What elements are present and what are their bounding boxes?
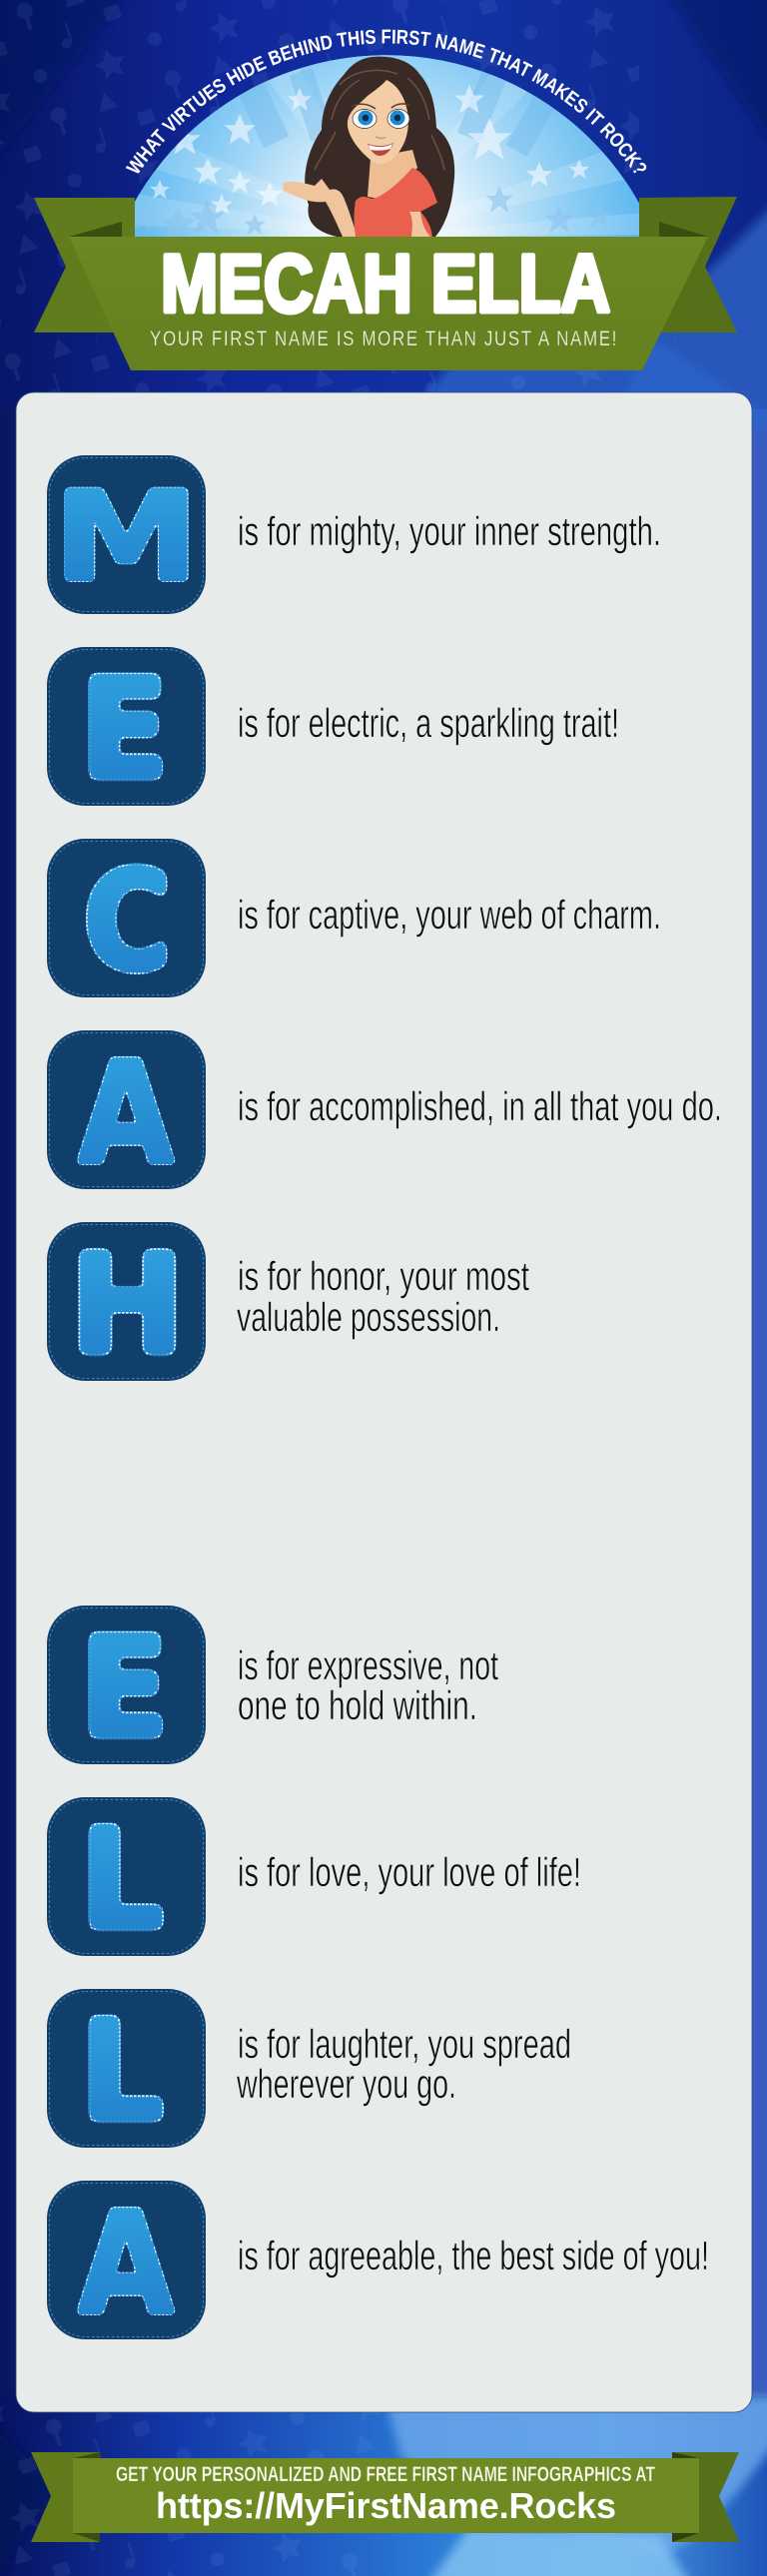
title: MECAH ELLA bbox=[161, 239, 610, 329]
row: A (second): A bbox=[78, 2181, 174, 2346]
face bbox=[348, 80, 408, 164]
row: L bbox=[47, 1797, 581, 1960]
tail right bbox=[672, 2452, 739, 2542]
eyes bbox=[353, 110, 377, 128]
row: L (second) bbox=[47, 1989, 571, 2152]
row: E bbox=[47, 647, 619, 810]
nose bbox=[376, 137, 385, 138]
row: H: valuable possession. bbox=[237, 1294, 500, 1340]
footer ribbon bbox=[31, 2452, 739, 2542]
front panel bbox=[69, 237, 708, 370]
tile C bbox=[47, 839, 206, 997]
row: M: M bbox=[53, 465, 200, 609]
ribbon tail right bbox=[639, 197, 737, 332]
row: E: E bbox=[80, 649, 168, 810]
text: is for love, your love of life! bbox=[238, 1849, 581, 1895]
front bbox=[73, 2458, 699, 2533]
row: H bbox=[47, 1222, 529, 1385]
illustration: woman bbox=[283, 57, 454, 237]
brows bbox=[352, 104, 410, 109]
text: is for expressive, not bbox=[238, 1642, 498, 1688]
mouth bbox=[368, 143, 393, 156]
hair bbox=[305, 57, 454, 237]
ribbon: title banner bbox=[34, 197, 737, 370]
row: L (second): L bbox=[80, 1991, 164, 2152]
tile E bbox=[47, 647, 206, 806]
row: M bbox=[47, 455, 661, 614]
row: C: C bbox=[84, 843, 171, 1001]
subtitle: YOUR FIRST NAME IS MORE THAN JUST A NAME! bbox=[150, 327, 618, 350]
header: dome with starburst bbox=[97, 55, 676, 343]
tile L bbox=[47, 1989, 206, 2148]
shirt bbox=[354, 168, 437, 237]
row: A bbox=[47, 1030, 722, 1196]
ribbon tail left bbox=[34, 198, 135, 332]
tile L bbox=[47, 1797, 206, 1956]
tail left bbox=[31, 2452, 100, 2542]
panel: letters background bbox=[16, 392, 752, 2412]
text: is for electric, a sparkling trait! bbox=[238, 700, 619, 746]
row: L (second): wherever you go. bbox=[236, 2061, 456, 2107]
row: E (second word): E bbox=[80, 1608, 168, 1768]
heading: arched question: WHAT VIRTUES HIDE BEHIND THIS FIRST NAME THAT MAKES IT ROCK? bbox=[126, 30, 647, 174]
row: A: A bbox=[78, 1030, 174, 1196]
tile H bbox=[47, 1222, 206, 1381]
url: https://MyFirstName.Rocks bbox=[156, 2485, 616, 2526]
row: E (second word): one to hold within. bbox=[238, 1682, 477, 1728]
arm and hand bbox=[283, 179, 358, 237]
text: is for honor, your most bbox=[238, 1253, 529, 1299]
row: H: H bbox=[70, 1226, 185, 1385]
tile E bbox=[47, 1606, 206, 1764]
text: is for laughter, you spread bbox=[238, 2021, 571, 2067]
row: E (second word) bbox=[47, 1606, 498, 1768]
tile M bbox=[47, 455, 206, 614]
neck bbox=[368, 150, 417, 200]
row: A (second) bbox=[47, 2181, 709, 2346]
row: L: L bbox=[80, 1799, 164, 1960]
row: C bbox=[47, 839, 661, 1001]
tile A bbox=[47, 2181, 206, 2339]
tile A bbox=[47, 1030, 206, 1189]
